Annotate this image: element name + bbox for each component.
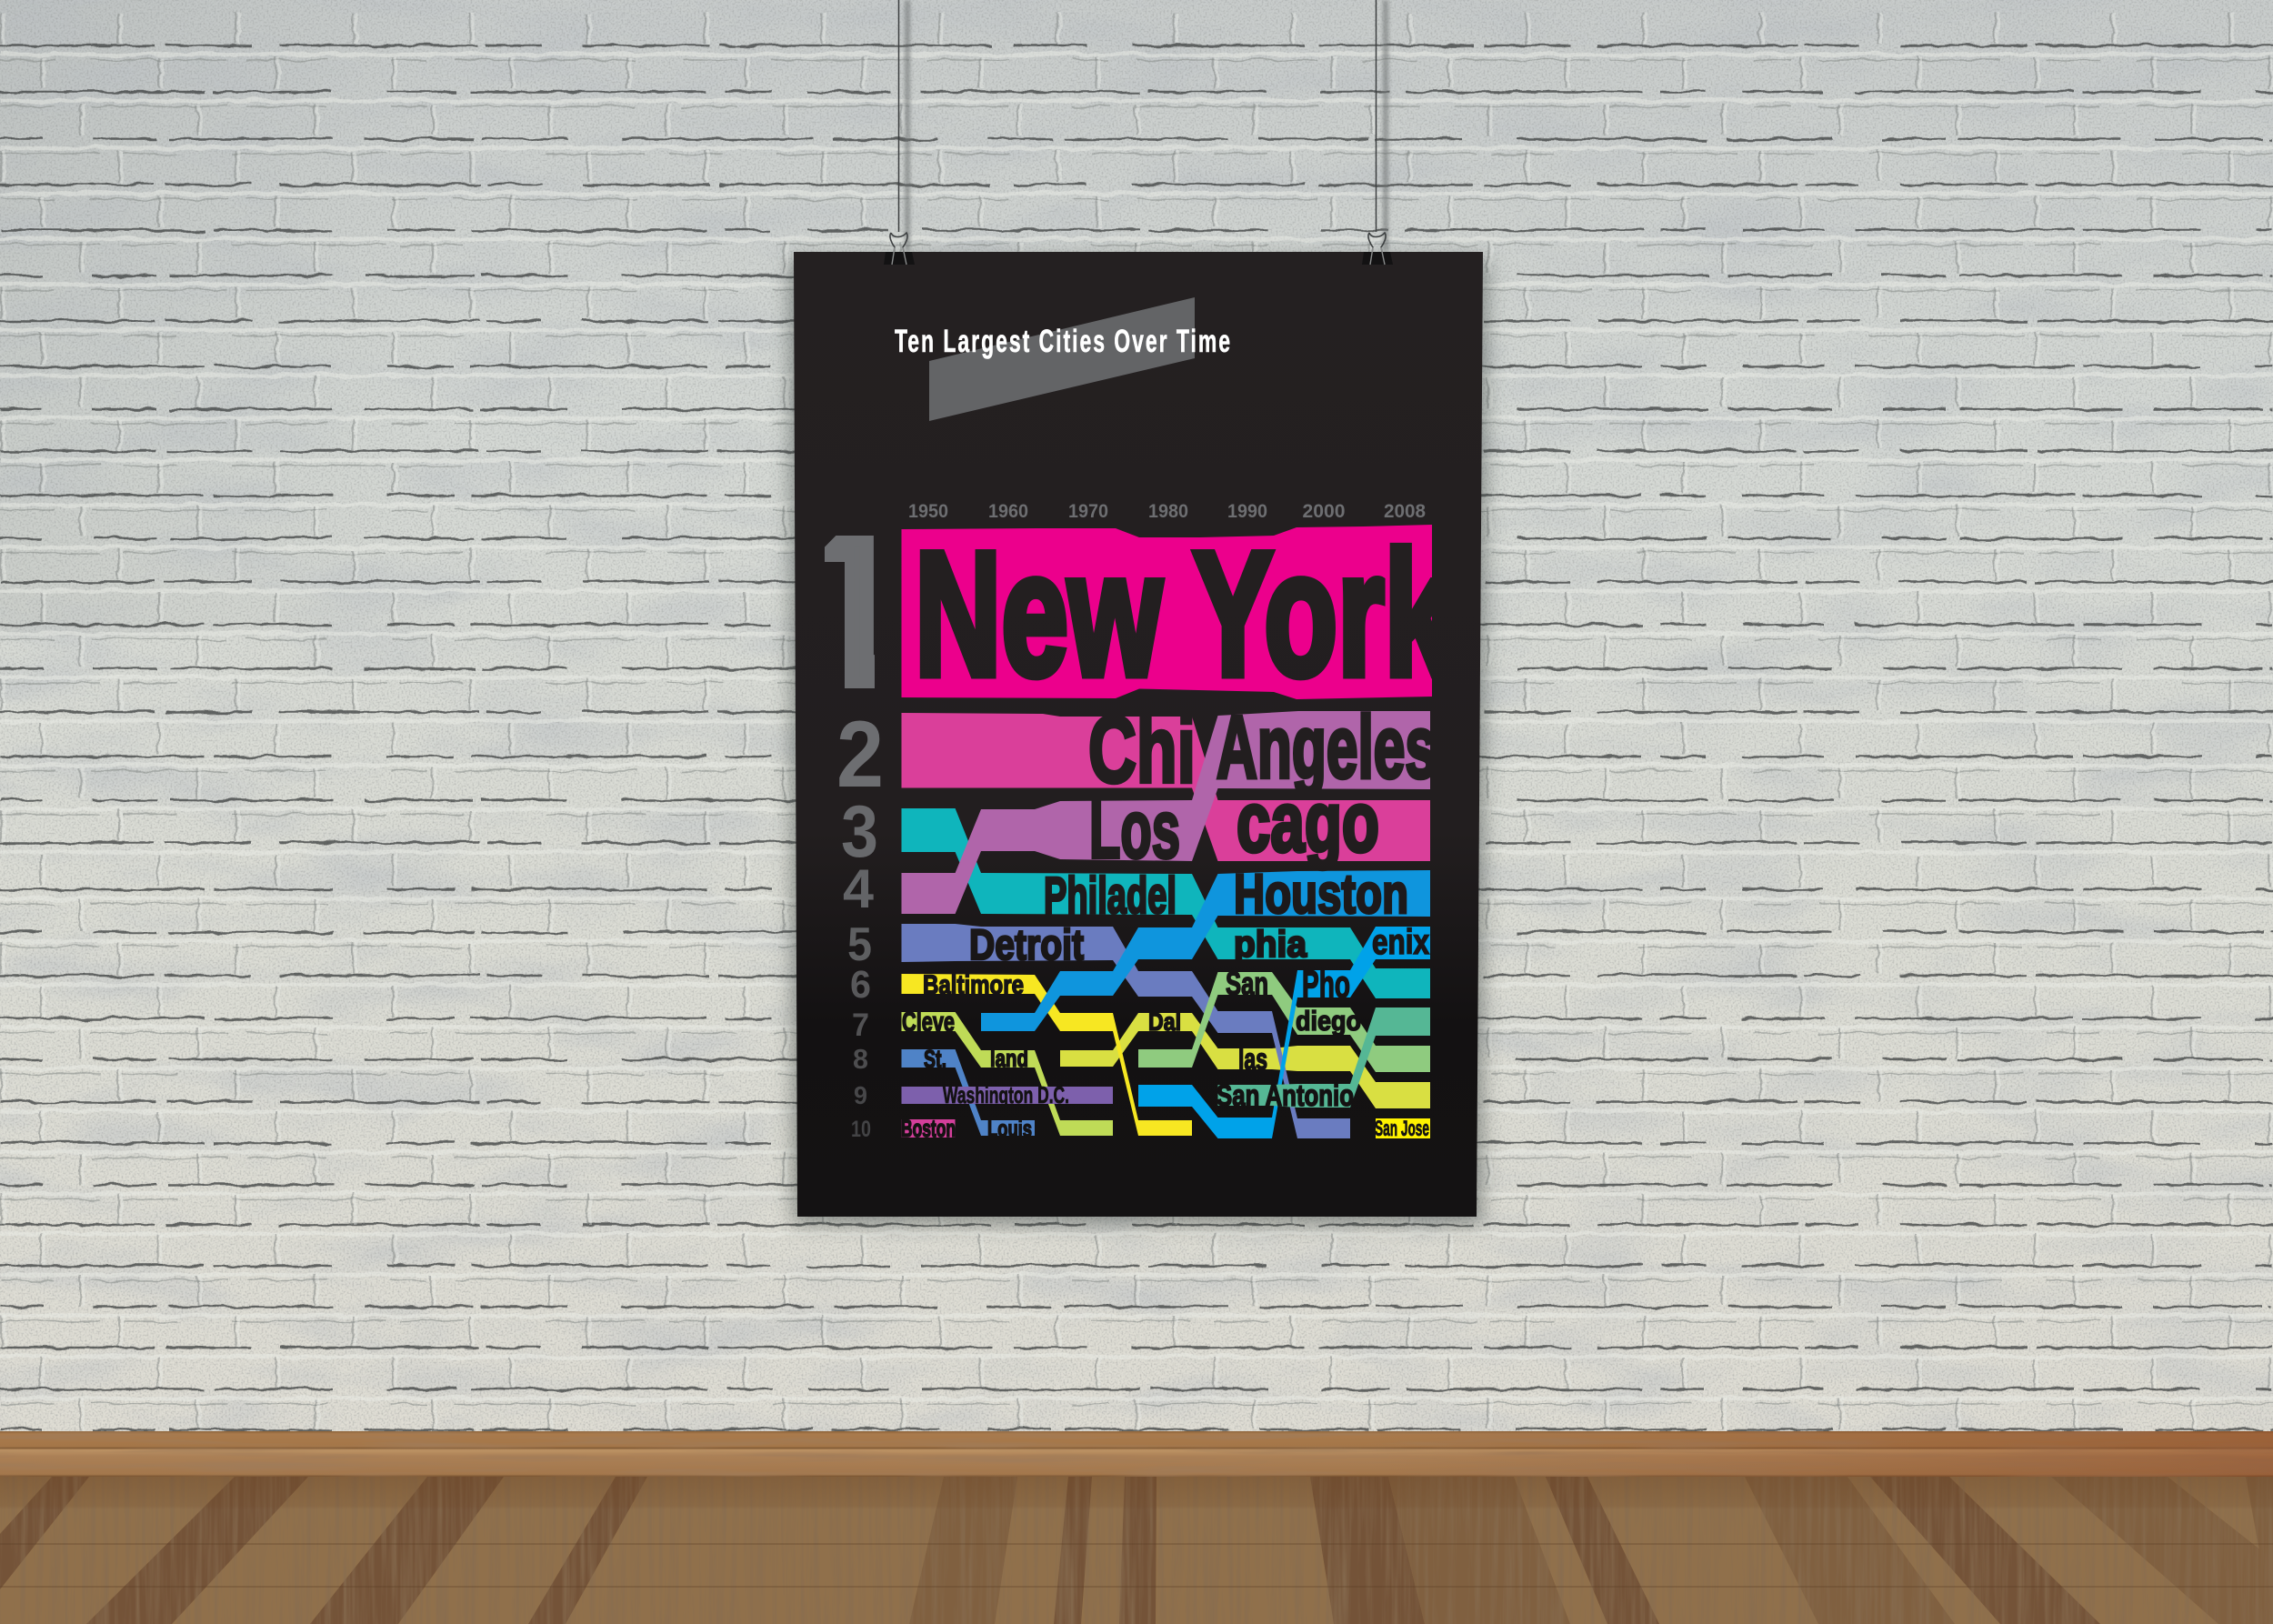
label: Cleve(land): Cleve: [902, 1006, 955, 1038]
rank 10: 10: [851, 1117, 871, 1142]
poster drop shadow: [789, 259, 1487, 1224]
band: Detroit: [902, 924, 1350, 1138]
rank 3: 3: [841, 791, 878, 873]
band: Boston: [902, 1119, 955, 1138]
label: (Pho)enix: enix: [1372, 923, 1429, 962]
band: Dallas: [1060, 1013, 1430, 1108]
rank 2: 2: [836, 702, 884, 807]
band: Baltimore: [902, 974, 1192, 1136]
label: (Philadel)phia: phia: [1234, 923, 1307, 965]
label: Boston: Boston: [901, 1115, 956, 1142]
rank 8: 8: [853, 1043, 868, 1075]
hanging wire: left: [898, 0, 910, 251]
label: Los: Los: [1089, 785, 1180, 876]
year axis: 1960: [988, 501, 1028, 522]
band: San Jose: [1376, 1118, 1430, 1138]
year axis: [908, 501, 1426, 522]
band: Phoenix: [1138, 927, 1430, 1138]
label: (Chi)cago right part: cago: [1237, 774, 1379, 869]
rank 9: 9: [854, 1081, 867, 1109]
rank 5: 5: [847, 918, 872, 971]
title: Ten Largest Cities Over Time: [895, 324, 1232, 359]
binder clip: right: [1362, 233, 1393, 265]
label: San Jose: San Jose: [1375, 1117, 1429, 1141]
band: St. Louis: [902, 1049, 1035, 1136]
wood baseboard: [0, 1431, 2273, 1477]
band: Washington D.C.: [902, 1087, 1113, 1104]
label: (San) diego: diego: [1296, 1005, 1361, 1037]
label: Louis: Louis: [987, 1115, 1032, 1142]
label: Washington D.C.: Washington D.C.: [943, 1081, 1069, 1108]
band: Los Angeles: [902, 711, 1430, 914]
label: St.: St.: [924, 1045, 946, 1073]
label: San (Diego): San: [1226, 965, 1268, 1002]
label: (Dal)las: las: [1238, 1042, 1267, 1076]
label: San Antonio: San Antonio: [1217, 1078, 1354, 1112]
band: New York: [902, 525, 1432, 699]
title accent parallelogram: [929, 297, 1195, 421]
binder clip: left: [884, 233, 915, 265]
label: Pho(enix): Pho: [1302, 963, 1350, 1007]
year axis: 1950: [908, 501, 948, 522]
band: Philadelphia: [902, 808, 1430, 998]
rank numbers: [825, 536, 880, 1137]
rank 4: 4: [843, 858, 875, 919]
year axis: 1970: [1068, 501, 1108, 522]
rank 7: 7: [852, 1007, 869, 1043]
label: Philadel(phia): Philadel: [1044, 867, 1177, 925]
hanging wire: right: [1377, 0, 1388, 251]
year axis: 2000: [1302, 501, 1346, 522]
band: Cleveland: [902, 1012, 1113, 1136]
label: Dal(las): Dal: [1148, 1007, 1181, 1036]
year axis: 1990: [1227, 501, 1267, 522]
year axis: 1980: [1148, 501, 1188, 522]
label: (Los) Angeles: Angeles: [1217, 697, 1437, 797]
label: Houston: Houston: [1234, 863, 1408, 925]
bump chart: city rank bands: [902, 525, 1432, 1138]
label: New York: New York: [915, 516, 1452, 713]
label: Baltimore: Baltimore: [923, 970, 1024, 1000]
rank 1: 1: [815, 487, 893, 736]
wood floor: [0, 1477, 2273, 1624]
city labels: [901, 516, 1452, 1142]
label: Detroit: Detroit: [969, 920, 1084, 968]
label: (Cleve)land: land: [990, 1045, 1028, 1072]
band: San Antonio: [1218, 1007, 1430, 1108]
poster sheet: [794, 252, 1483, 1217]
band: Chicago: [902, 713, 1430, 861]
band: Houston: [981, 870, 1430, 1031]
year axis: 2008: [1384, 501, 1426, 522]
label: Chi(cago) left part: Chi: [1088, 697, 1196, 803]
band: San Diego: [1138, 972, 1430, 1072]
rank 6: 6: [850, 963, 871, 1007]
